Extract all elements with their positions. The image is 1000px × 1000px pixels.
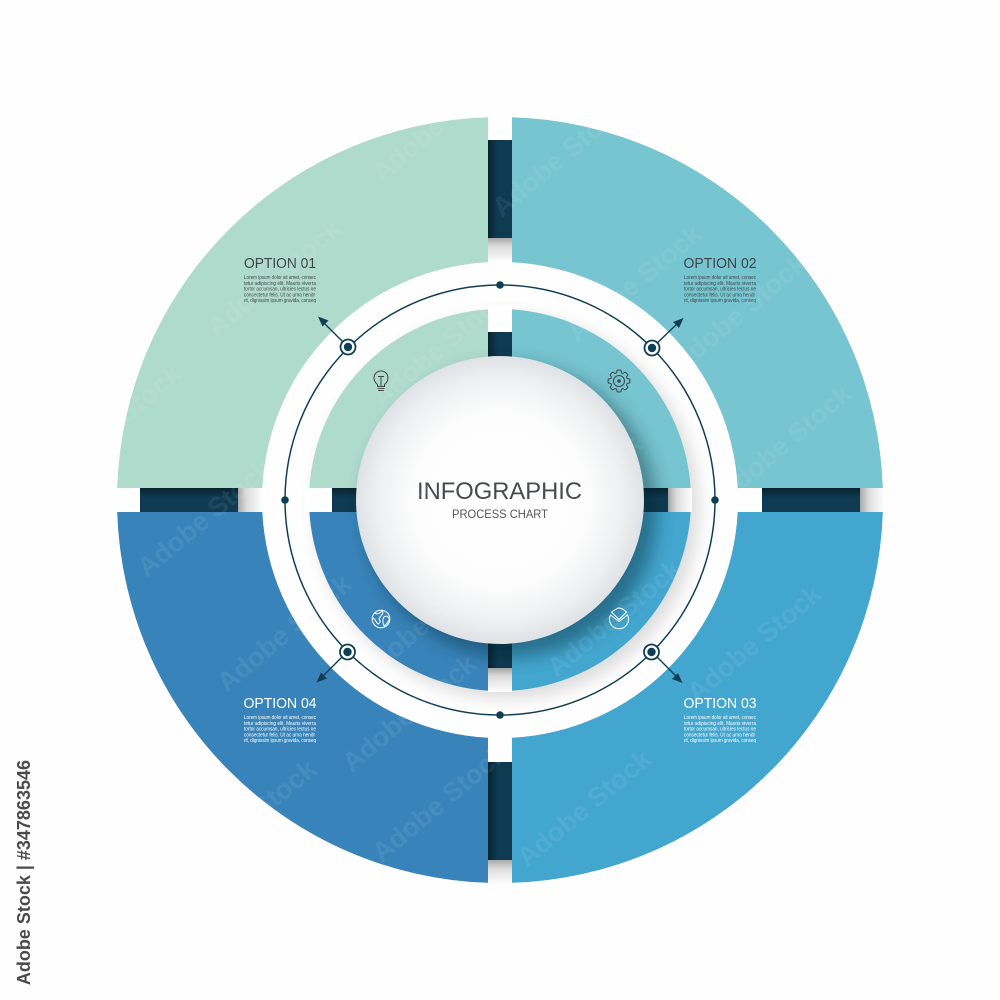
central disc shadow (365, 365, 657, 657)
watermark pattern: Adobe Stock (716, 748, 863, 878)
arrow: option 04 (316, 652, 347, 682)
ring shading behind inner sectors (315, 315, 699, 699)
text block: option 03: OPTION 03 (684, 695, 756, 712)
text block: option 01 (244, 255, 316, 304)
watermark pattern: Adobe Stock (511, 743, 658, 873)
watermark pattern: Adobe Stock (176, 753, 323, 883)
watermark pattern: Adobe Stock (156, 93, 303, 223)
watermark pattern: Adobe Stock (376, 398, 523, 528)
centre gap cover (230, 230, 765, 765)
arrow: option 03 (652, 652, 682, 683)
orbit ring line (285, 285, 715, 715)
text block: option 02: tortor accumsan, ultricies lectus ne (684, 286, 756, 292)
watermark pattern (0, 48, 863, 883)
stock id side label: Adobe Stock | #347863546 (14, 760, 34, 985)
watermark pattern: Adobe Stock (131, 453, 278, 583)
panel: option 01 outer sector (117, 117, 488, 488)
panel: option 02 outer sector (512, 117, 883, 488)
node: option 01 (340, 340, 356, 354)
icon: gear (608, 370, 630, 392)
text block: option 04: rit, dignissim ipsum gravida, conseq (244, 738, 316, 744)
text block: option 03: tortor accumsan, ultricies lectus ne (684, 726, 756, 732)
node: option 03 (644, 644, 659, 660)
fold shadows outside bars (238, 238, 884, 884)
orbit dots (281, 281, 719, 719)
arrow: option 01 (318, 316, 348, 347)
panel: option 04 inner sector (309, 512, 488, 691)
node: option 02 (644, 340, 660, 356)
text block: option 03: consectetur felis. Ut ac urna hendr (684, 732, 755, 738)
text block: option 01: rit, dignissim ipsum gravida, conseq (244, 298, 316, 304)
text block: option 03: Lorem ipsum dolor sit amet, consec (684, 715, 756, 721)
node: option 04 (340, 644, 355, 660)
text block: option 01: OPTION 01 (244, 255, 316, 272)
panel: option 01 inner sector (309, 309, 488, 488)
icon: globe (372, 610, 390, 628)
icon: light bulb (374, 371, 388, 390)
watermark pattern: Adobe Stock (336, 648, 483, 778)
text block: option 01: tortor accumsan, ultricies lectus ne (244, 286, 316, 292)
text block: option 04: tetur adipiscing elit. Mauris viverra (244, 721, 316, 727)
text block: option 01: tetur adipiscing elit. Mauris viverra (244, 281, 316, 287)
title: INFOGRAPHIC (417, 478, 582, 505)
watermark pattern: Adobe Stock (701, 48, 848, 178)
text block: option 02: tetur adipiscing elit. Mauris viverra (684, 281, 756, 287)
text block: option 03: tetur adipiscing elit. Mauris viverra (684, 721, 756, 727)
watermark pattern: Adobe Stock (681, 578, 828, 708)
watermark pattern: Adobe Stock (351, 558, 498, 688)
connector bars (140, 140, 860, 860)
text block: option 04: tortor accumsan, ultricies lectus ne (244, 726, 316, 732)
text block: option 01: consectetur felis. Ut ac urna hendr (244, 292, 315, 298)
watermark pattern: Adobe Stock (31, 50, 178, 180)
watermark pattern: Adobe Stock (366, 283, 513, 413)
watermark pattern: Adobe Stock (211, 568, 358, 698)
text block: option 04: consectetur felis. Ut ac urna hendr (244, 732, 315, 738)
text block: option 02: rit, dignissim ipsum gravida, conseq (684, 298, 756, 304)
panel: option 03 inner sector (512, 512, 691, 691)
watermark pattern: Adobe Stock (561, 218, 708, 348)
panel: option 04 outer sector (117, 512, 488, 883)
watermark pattern: Adobe Stock (541, 553, 688, 683)
watermark pattern: Adobe Stock (711, 378, 858, 508)
icon: pie chart (610, 608, 628, 629)
watermark pattern: Adobe Stock (501, 428, 648, 558)
watermark pattern: Adobe Stock (0, 253, 143, 383)
arrow: option 02 (652, 318, 684, 348)
text block: option 04: OPTION 04 (244, 695, 316, 712)
central disc (356, 356, 644, 644)
watermark pattern: Adobe Stock (366, 58, 513, 188)
subtitle: PROCESS CHART (452, 507, 549, 521)
watermark pattern: Adobe Stock (366, 738, 513, 868)
text block: option 04 (244, 695, 316, 744)
watermark pattern: Adobe Stock (41, 358, 188, 488)
text block: option 03 (684, 695, 756, 744)
watermark pattern: Adobe Stock (486, 93, 633, 223)
text block: option 02: OPTION 02 (684, 255, 756, 272)
text block: option 04: Lorem ipsum dolor sit amet, consec (244, 715, 316, 721)
text block: option 02 (684, 255, 756, 304)
text block: option 01: Lorem ipsum dolor sit amet, consec (244, 275, 316, 281)
panel: option 02 inner sector (512, 309, 691, 488)
text block: option 02: consectetur felis. Ut ac urna hendr (684, 292, 755, 298)
text block: option 02: Lorem ipsum dolor sit amet, consec (684, 275, 756, 281)
watermark pattern: Adobe Stock (201, 213, 348, 343)
text block: option 03: rit, dignissim ipsum gravida, conseq (684, 738, 756, 744)
panel: option 03 outer sector (512, 512, 883, 883)
watermark pattern: Adobe Stock (666, 248, 813, 378)
